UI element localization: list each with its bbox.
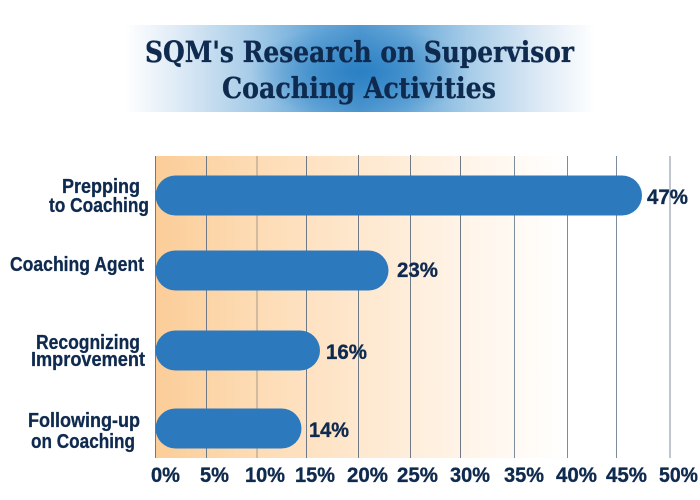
label: Recognizing Improvement <box>31 332 145 371</box>
x axis labels: 20% <box>347 464 388 487</box>
title <box>145 35 575 105</box>
x axis labels: 30% <box>450 464 490 487</box>
label: Prepping to Coaching <box>49 176 149 217</box>
bar: Following-up on Coaching 14% <box>156 408 302 448</box>
label: Following-up on Coaching: on Coaching <box>31 431 135 453</box>
label: Following-up on Coaching <box>28 410 140 453</box>
bar: Coaching Agent 23% <box>156 250 388 290</box>
title banner <box>125 25 595 112</box>
x axis labels: 0% <box>151 464 180 487</box>
x axis labels: 10% <box>245 464 285 487</box>
label: Following-up on Coaching: Following-up <box>28 410 140 432</box>
label: Prepping to Coaching: Prepping <box>62 176 140 198</box>
x axis labels: 5% <box>200 464 229 487</box>
title: SQM's Research on Supervisor <box>145 35 575 69</box>
value: 47%: 47% <box>647 186 688 209</box>
value: 14%: 14% <box>309 419 349 442</box>
label: Coaching Agent: Coaching Agent <box>10 254 144 276</box>
x axis labels: 40% <box>556 464 597 487</box>
x axis labels: 35% <box>504 464 544 487</box>
chart plot area with gridlines <box>155 155 670 458</box>
title: Coaching Activities <box>222 71 496 105</box>
x axis labels: 25% <box>397 464 438 487</box>
bar: Recognizing Improvement 16% <box>156 330 320 370</box>
bar: Prepping to Coaching 47% <box>156 176 642 216</box>
x axis labels: 45% <box>606 464 647 487</box>
x axis labels: 15% <box>295 464 335 487</box>
label: Recognizing Improvement: Improvement <box>31 349 145 371</box>
label: Recognizing Improvement: Recognizing <box>36 332 140 354</box>
value: 23%: 23% <box>397 259 438 282</box>
label: Prepping to Coaching: to Coaching <box>49 195 149 217</box>
x axis labels <box>151 464 698 487</box>
value: 16%: 16% <box>326 341 367 364</box>
x axis labels: 50% <box>659 464 698 487</box>
